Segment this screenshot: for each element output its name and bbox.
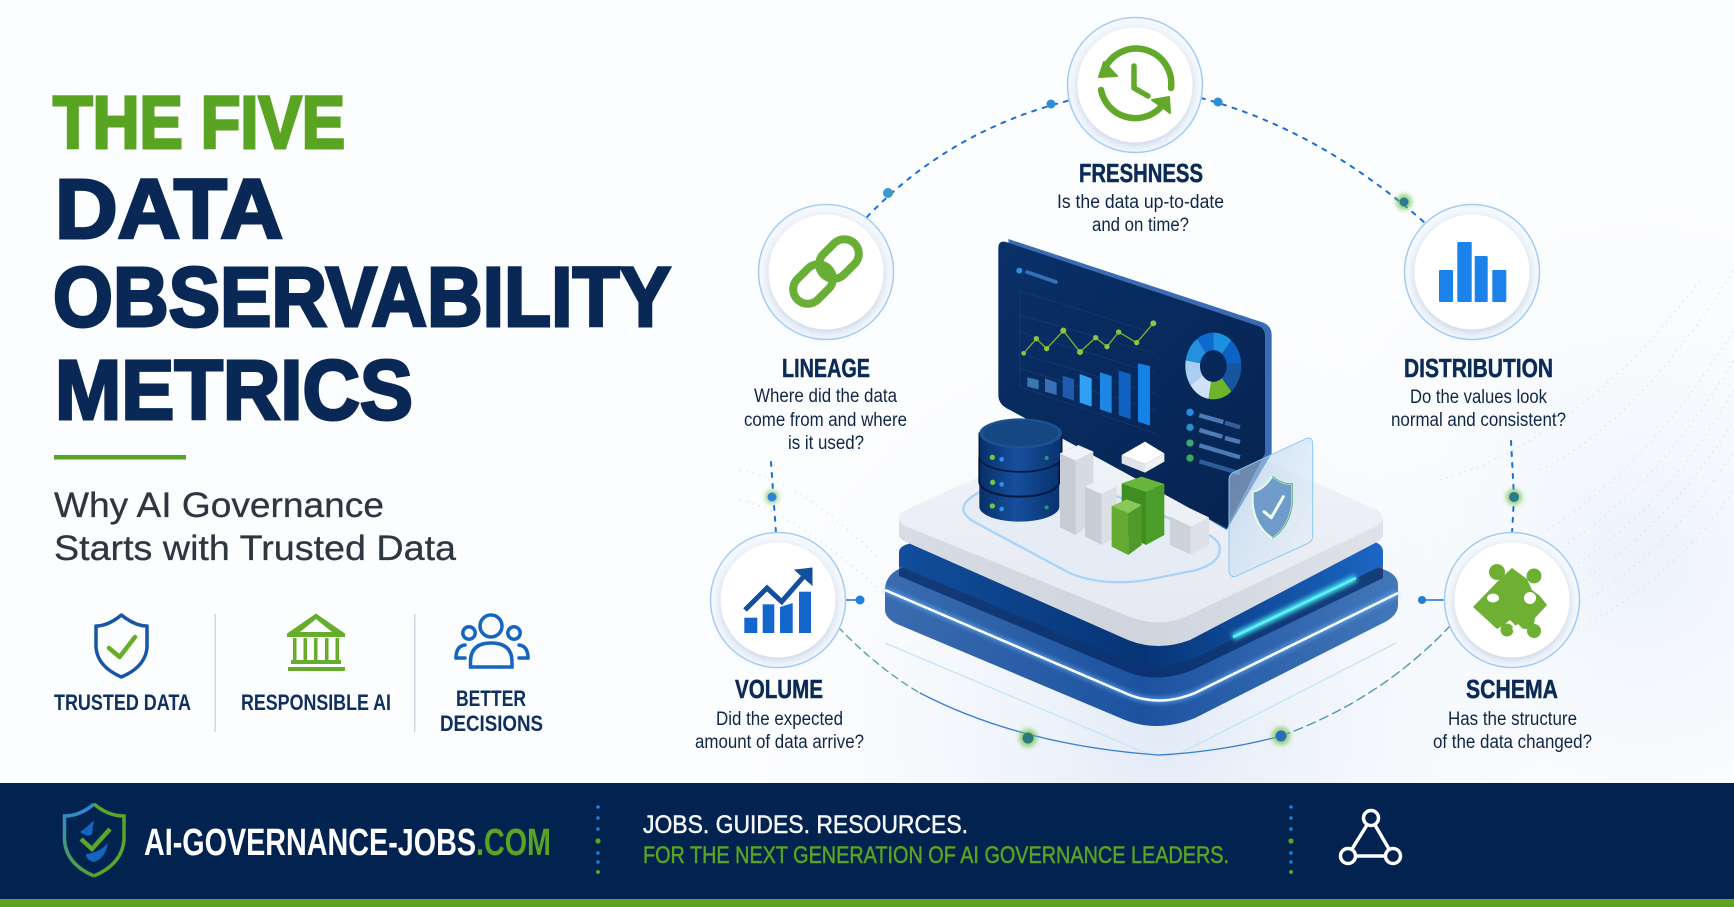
subtitle: Why AI Governance [54, 486, 384, 525]
icon: rising bar chart with arrow [710, 532, 846, 668]
subtitle [54, 486, 457, 568]
icon: clock with refresh arrows [1068, 18, 1202, 152]
tagline: FOR THE NEXT GENERATION OF AI GOVERNANCE LEADERS. [643, 842, 1229, 869]
description: Do the values look [1410, 387, 1547, 408]
platform: middle layer [899, 470, 1383, 678]
platform: white top slab [899, 408, 1383, 646]
logo: site name: AI-GOVERNANCE-JOBS.COM [144, 822, 551, 864]
monitor screen [998, 239, 1272, 530]
description: Did the expected [716, 709, 843, 730]
description: of the data changed? [1433, 732, 1592, 753]
tagline: JOBS. GUIDES. RESOURCES. [643, 811, 968, 839]
metric: distribution [1391, 204, 1566, 431]
database cylinder [979, 418, 1062, 522]
description: Is the data up-to-date [1057, 192, 1224, 213]
description [1433, 709, 1592, 753]
description: come from and where [744, 410, 907, 431]
connecting arcs [771, 98, 1514, 755]
icon: network triangle [1340, 810, 1400, 864]
platform: bottom layer [885, 470, 1398, 726]
benefit: responsible ai [241, 614, 391, 715]
description [695, 709, 864, 753]
monitor donut chart [1193, 341, 1234, 391]
description: normal and consistent? [1391, 410, 1566, 431]
metric: freshness [1057, 18, 1224, 236]
description [1391, 387, 1566, 431]
footer band [0, 783, 1734, 907]
metric: volume: VOLUME [735, 674, 823, 704]
logo: shield [64, 804, 124, 876]
central platform illustration [885, 239, 1398, 726]
benefit: trusted data [54, 615, 191, 715]
subtitle: Starts with Trusted Data [54, 529, 457, 568]
title underline [54, 455, 186, 460]
metric: volume [695, 532, 864, 753]
metric: lineage: LINEAGE [782, 353, 870, 383]
title: OBSERVABILITY [53, 250, 671, 344]
icon: people group [456, 615, 528, 667]
description: Has the structure [1448, 709, 1577, 730]
metric: distribution: DISTRIBUTION [1404, 353, 1553, 383]
title: THE FIVE [53, 81, 345, 164]
benefit: better decisions: DECISIONS [440, 711, 543, 736]
title [53, 81, 671, 437]
dashboard monitor and objects [963, 239, 1313, 582]
tray under objects [963, 473, 1220, 582]
metric: lineage [744, 204, 907, 454]
icon: institution building [287, 614, 345, 671]
connector nodes [765, 98, 1522, 747]
monitor bar chart [1027, 363, 1150, 426]
icon: chain link [758, 204, 894, 340]
benefit: trusted data: TRUSTED DATA [54, 690, 191, 715]
description [744, 386, 907, 454]
metric: schema: SCHEMA [1466, 674, 1558, 704]
metric: freshness: FRESHNESS [1079, 158, 1203, 188]
benefit: better decisions: BETTER [456, 686, 526, 711]
icon: bar chart [1404, 204, 1540, 340]
benefit: responsible ai: RESPONSIBLE AI [241, 690, 391, 715]
metric: schema [1433, 532, 1592, 753]
tagline [643, 811, 1229, 869]
icon: shield check [96, 615, 147, 677]
description: and on time? [1092, 215, 1189, 236]
title: DATA [55, 162, 283, 256]
description [1057, 192, 1224, 236]
white and green bars [1060, 442, 1209, 555]
icon: puzzle piece [1444, 532, 1580, 668]
glass shield panel [1229, 438, 1313, 577]
benefit: better decisions [440, 615, 543, 736]
dotted divider [595, 805, 601, 874]
description: Where did the data [754, 386, 897, 407]
description: is it used? [788, 433, 864, 454]
monitor legend [1186, 409, 1240, 473]
dotted divider [1288, 805, 1294, 874]
description: amount of data arrive? [695, 732, 864, 753]
monitor line chart [1021, 320, 1156, 356]
title: METRICS [55, 343, 413, 437]
